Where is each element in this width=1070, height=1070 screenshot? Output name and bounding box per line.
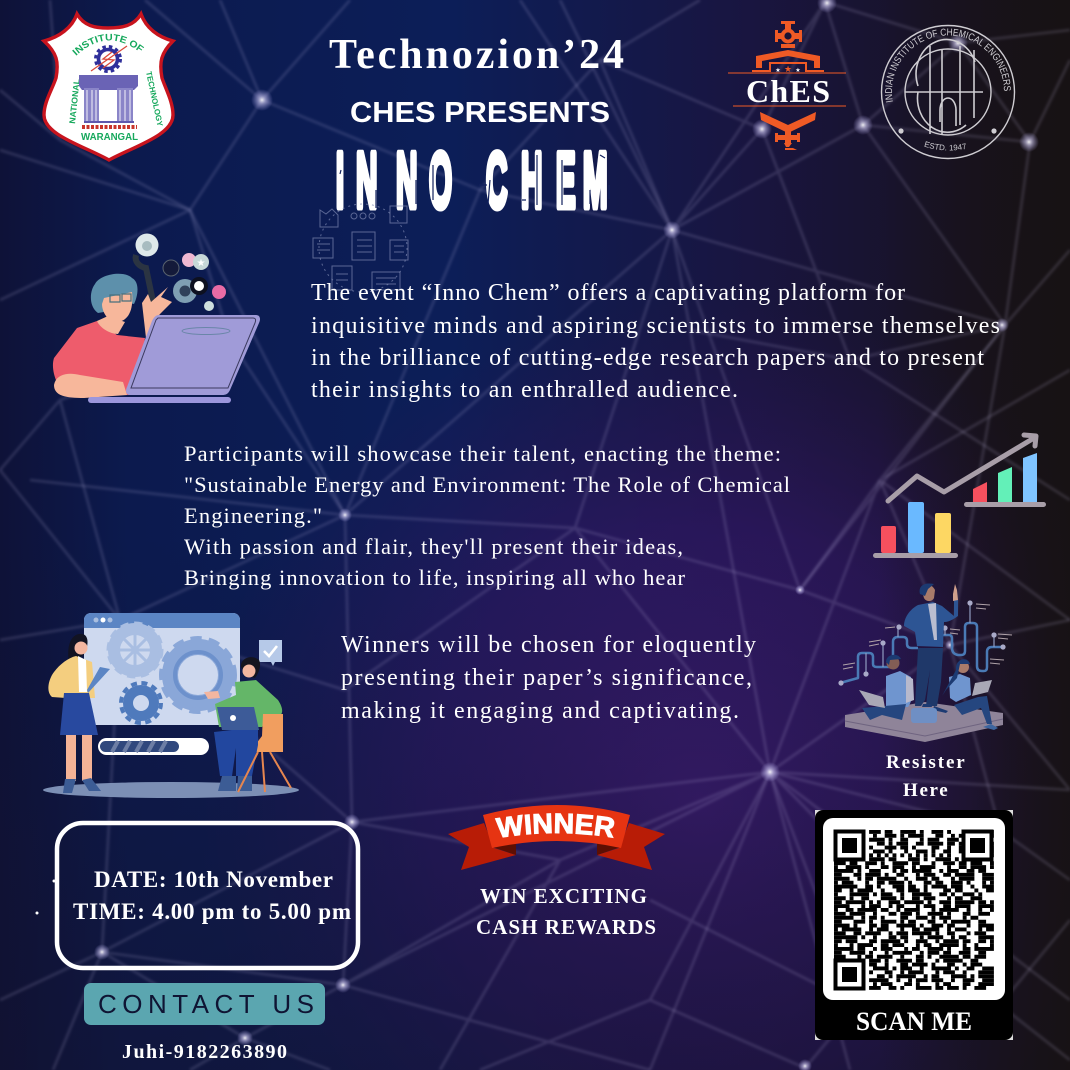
paragraph: theme [184,441,790,590]
right sitting woman [949,674,971,702]
paragraph: theme: Bringing innovation to life, inspiring all who hear [184,565,686,590]
date: DATE: 10th November [94,867,333,892]
laptop [126,315,260,395]
left sitting man [886,671,912,707]
check bubble [259,640,282,666]
text: cash rewards [476,884,656,939]
logo: ChES: ★ [795,67,801,74]
hair [91,274,138,313]
text: resister here [886,752,966,801]
winner ribbon: WINNER [494,813,614,838]
text: resister here: Resister [886,752,966,773]
illustration: person with laptop [53,234,260,403]
ChES wordmark: ChES [746,73,830,109]
text: cash rewards: WIN EXCITING [480,884,647,908]
contact us button: CONTACT US [98,989,314,1019]
paragraph: winners: presenting their paper’s significance, [341,665,752,691]
illustration: team on books [838,583,1012,742]
crest gateway [79,75,138,123]
contact name and phone: Juhi-9182263890 [122,1041,287,1063]
subtitle: CHES PRESENTS: CHES PRESENTS [350,97,610,129]
shield top [756,50,820,68]
qr finder patterns [834,830,993,990]
paragraph: event description: in the brilliance of cutting-edge research papers and to present [311,345,984,371]
ground [43,782,299,798]
paragraph: event description: The event “Inno Chem” offers a captivating platform for [311,280,905,306]
paragraph: event description: their insights to an enthralled audience. [311,377,738,403]
text: resister here: Here [903,780,949,801]
crest text: TECHNOLOGY [144,71,165,128]
forearm [54,374,127,398]
paragraph: theme: Engineering." [184,503,322,528]
paragraph: event description: inquisitive minds and aspiring scientists to immerse themselves [311,313,1000,339]
paragraph: winners: making it engaging and captivating. [341,698,739,724]
wrench [136,255,156,316]
monogram [905,40,983,134]
illustration: team with gears [43,613,299,798]
qr code card [815,810,1013,1040]
circuit lines [840,623,1003,683]
gear 1 [109,624,161,676]
winner ribbon [448,805,665,870]
platform [845,702,1003,742]
crest text: WARANGAL [81,132,138,143]
paragraph: theme: "Sustainable Energy and Environment: The Role of Chemical [184,472,790,497]
shirt [53,321,145,395]
progress bar [98,738,209,755]
pipe valve [775,131,800,150]
logo: ChES: ★ [784,65,792,75]
paragraph: theme: Participants will showcase their talent, enacting the theme: [184,441,781,466]
paragraph: event description [311,280,1000,403]
logo: Indian Institute of Chemical Engineers [880,24,1016,160]
neck [97,316,125,334]
floating circles [136,234,226,311]
time: TIME: 4.00 pm to 5.00 pm [73,899,351,924]
date and time box [36,823,358,968]
title: Technozion'24: Technozion’24 [329,32,624,78]
logo: ChES [728,21,846,150]
crest text: INSTITUTE OF [72,34,144,56]
paragraph: theme: With passion and flair, they'll present their ideas, [184,534,683,559]
title: INNO CHEM: INNO CHEM [336,137,608,224]
illustration: rising bar charts [873,435,1046,558]
screen [84,613,240,725]
crest text [67,34,165,143]
icon: faint document outlines [313,204,408,292]
logo: ChES: ★ [775,67,781,74]
face [102,292,132,322]
crest text: NATIONAL [67,78,82,124]
logo: Indian Institute of Chemical Engineers: INDIAN INSTITUTE OF CHEMICAL ENGINEERS [885,28,1011,102]
qr modules [834,832,994,988]
gear 2 [162,639,234,711]
gear 3 [121,683,161,723]
floating circles: ★ [197,258,206,269]
logo: Indian Institute of Chemical Engineers: ESTD. 1947 [924,141,966,150]
standing man [915,648,943,706]
raised arm [142,287,172,338]
valve icon [775,21,802,48]
crest gear [91,46,127,72]
contact us button [84,983,325,1025]
woman [48,634,110,793]
scan me label: SCAN ME [856,1007,972,1036]
man [204,657,291,792]
paragraph: winners: Winners will be chosen for eloquently [341,632,756,658]
shield bottom [760,112,816,133]
paragraph: winners [341,632,756,724]
logo: NIT Warangal crest [40,10,176,162]
text: cash rewards: CASH REWARDS [476,915,656,939]
